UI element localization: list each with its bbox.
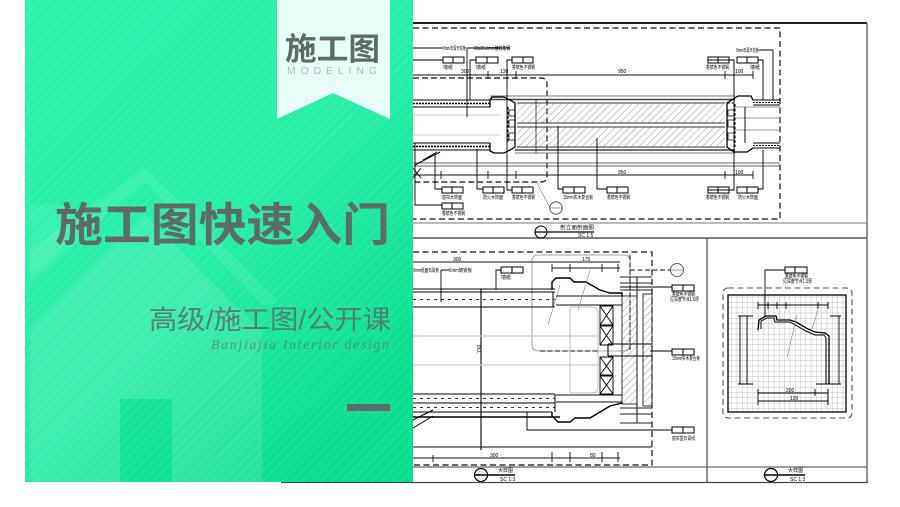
- ribbon badge: [277, 0, 390, 119]
- lower-left section drawing: [413, 252, 700, 483]
- detail drawing title: 大样图: [788, 467, 803, 474]
- sheet frame: [281, 23, 868, 482]
- profile detail drawing: [723, 267, 852, 483]
- mouldings: [552, 278, 622, 296]
- top labels: 9mm石膏天花板: [443, 45, 466, 52]
- lower labels: 300: [490, 453, 499, 459]
- profile labels: [783, 273, 812, 402]
- top labels: [442, 45, 760, 217]
- subtitle: 高级/施工图/公开课: [149, 305, 391, 335]
- top labels: 100: [735, 69, 744, 75]
- title: 施工图快速入门: [55, 199, 390, 251]
- badge heading: 施工图: [285, 32, 380, 67]
- top labels: 墙纸: [443, 64, 453, 71]
- english tagline: Banjiajia Interior design: [211, 338, 389, 353]
- top labels: 15mm实木复合板: [563, 194, 593, 201]
- top drawing title: 剖立面剖面图: [560, 224, 594, 231]
- top labels: 墙纸: [750, 64, 760, 71]
- lower labels: 9mm纸面石膏板: [413, 267, 439, 274]
- lower labels: 15mm实木复合板: [672, 355, 700, 362]
- technical drawing sheet: [281, 23, 868, 483]
- lower labels: [413, 257, 700, 459]
- panel: green cover: [25, 0, 413, 482]
- lower tags: [501, 267, 694, 433]
- lower labels: 见深度节点1.5厚: [670, 296, 699, 303]
- profile labels: 见深度节点1.5厚: [783, 278, 812, 285]
- leaders: [441, 270, 672, 430]
- profile labels: 200: [786, 388, 795, 394]
- lower labels: 710: [477, 344, 483, 353]
- top labels: 防火木饰面: [738, 194, 758, 201]
- top labels: 香槟色不锈钢: [512, 194, 535, 201]
- wall bands: [413, 100, 490, 150]
- top labels: 950: [618, 69, 627, 75]
- lower drawing title: 大样图: [498, 467, 513, 474]
- top labels: 香槟色不锈钢: [607, 194, 630, 201]
- callout circle: [670, 264, 684, 276]
- icon: house watermark: [30, 168, 280, 482]
- top labels: 窗帘木饰面: [442, 194, 462, 201]
- detail drawing title: SC 1:3: [790, 477, 806, 483]
- top labels: 9mm石膏天花板: [736, 47, 759, 54]
- top labels: 香槟色不锈钢: [512, 64, 535, 71]
- top labels: 香槟色不锈钢: [442, 210, 465, 217]
- top tags: [442, 57, 758, 209]
- blocks with crosses: [600, 306, 613, 394]
- accent bar: [347, 404, 390, 411]
- profile labels: 120: [790, 396, 799, 402]
- top drawing title: [535, 224, 594, 239]
- lower labels: 窗帘盒石膏线: [672, 435, 695, 442]
- top labels: 950: [618, 170, 627, 176]
- top drawing title: SC 1:5: [578, 233, 594, 239]
- top labels: 130: [500, 69, 509, 75]
- badge subheading: MODELING: [287, 65, 377, 77]
- top section drawing: [413, 28, 780, 239]
- top labels: 60x30x3mm镀锌角钢: [474, 45, 510, 52]
- mouldings: [490, 97, 515, 153]
- lower labels: 6mm玻镁板: [449, 267, 472, 274]
- callout circle: [537, 183, 562, 214]
- lower labels: 墙纸: [501, 274, 511, 281]
- top labels: 香槟色不锈钢: [706, 64, 729, 71]
- top labels: 100: [735, 170, 744, 176]
- lower labels: 香槟色不锈钢: [672, 291, 695, 298]
- lower drawing title: [474, 467, 516, 483]
- top labels: 防火木饰面: [483, 194, 503, 201]
- lower labels: 80: [590, 453, 596, 459]
- profile labels: 香槟色不锈钢: [785, 273, 808, 280]
- top labels: 300: [461, 69, 470, 75]
- leaders: [413, 48, 512, 190]
- detail drawing title: [764, 467, 806, 483]
- top labels: 香槟色不锈钢: [706, 194, 729, 201]
- lower drawing title: SC 1:3: [500, 477, 516, 483]
- lower labels: 300: [453, 257, 462, 263]
- top labels: 墙纸: [476, 64, 486, 71]
- lower labels: 175: [582, 257, 591, 263]
